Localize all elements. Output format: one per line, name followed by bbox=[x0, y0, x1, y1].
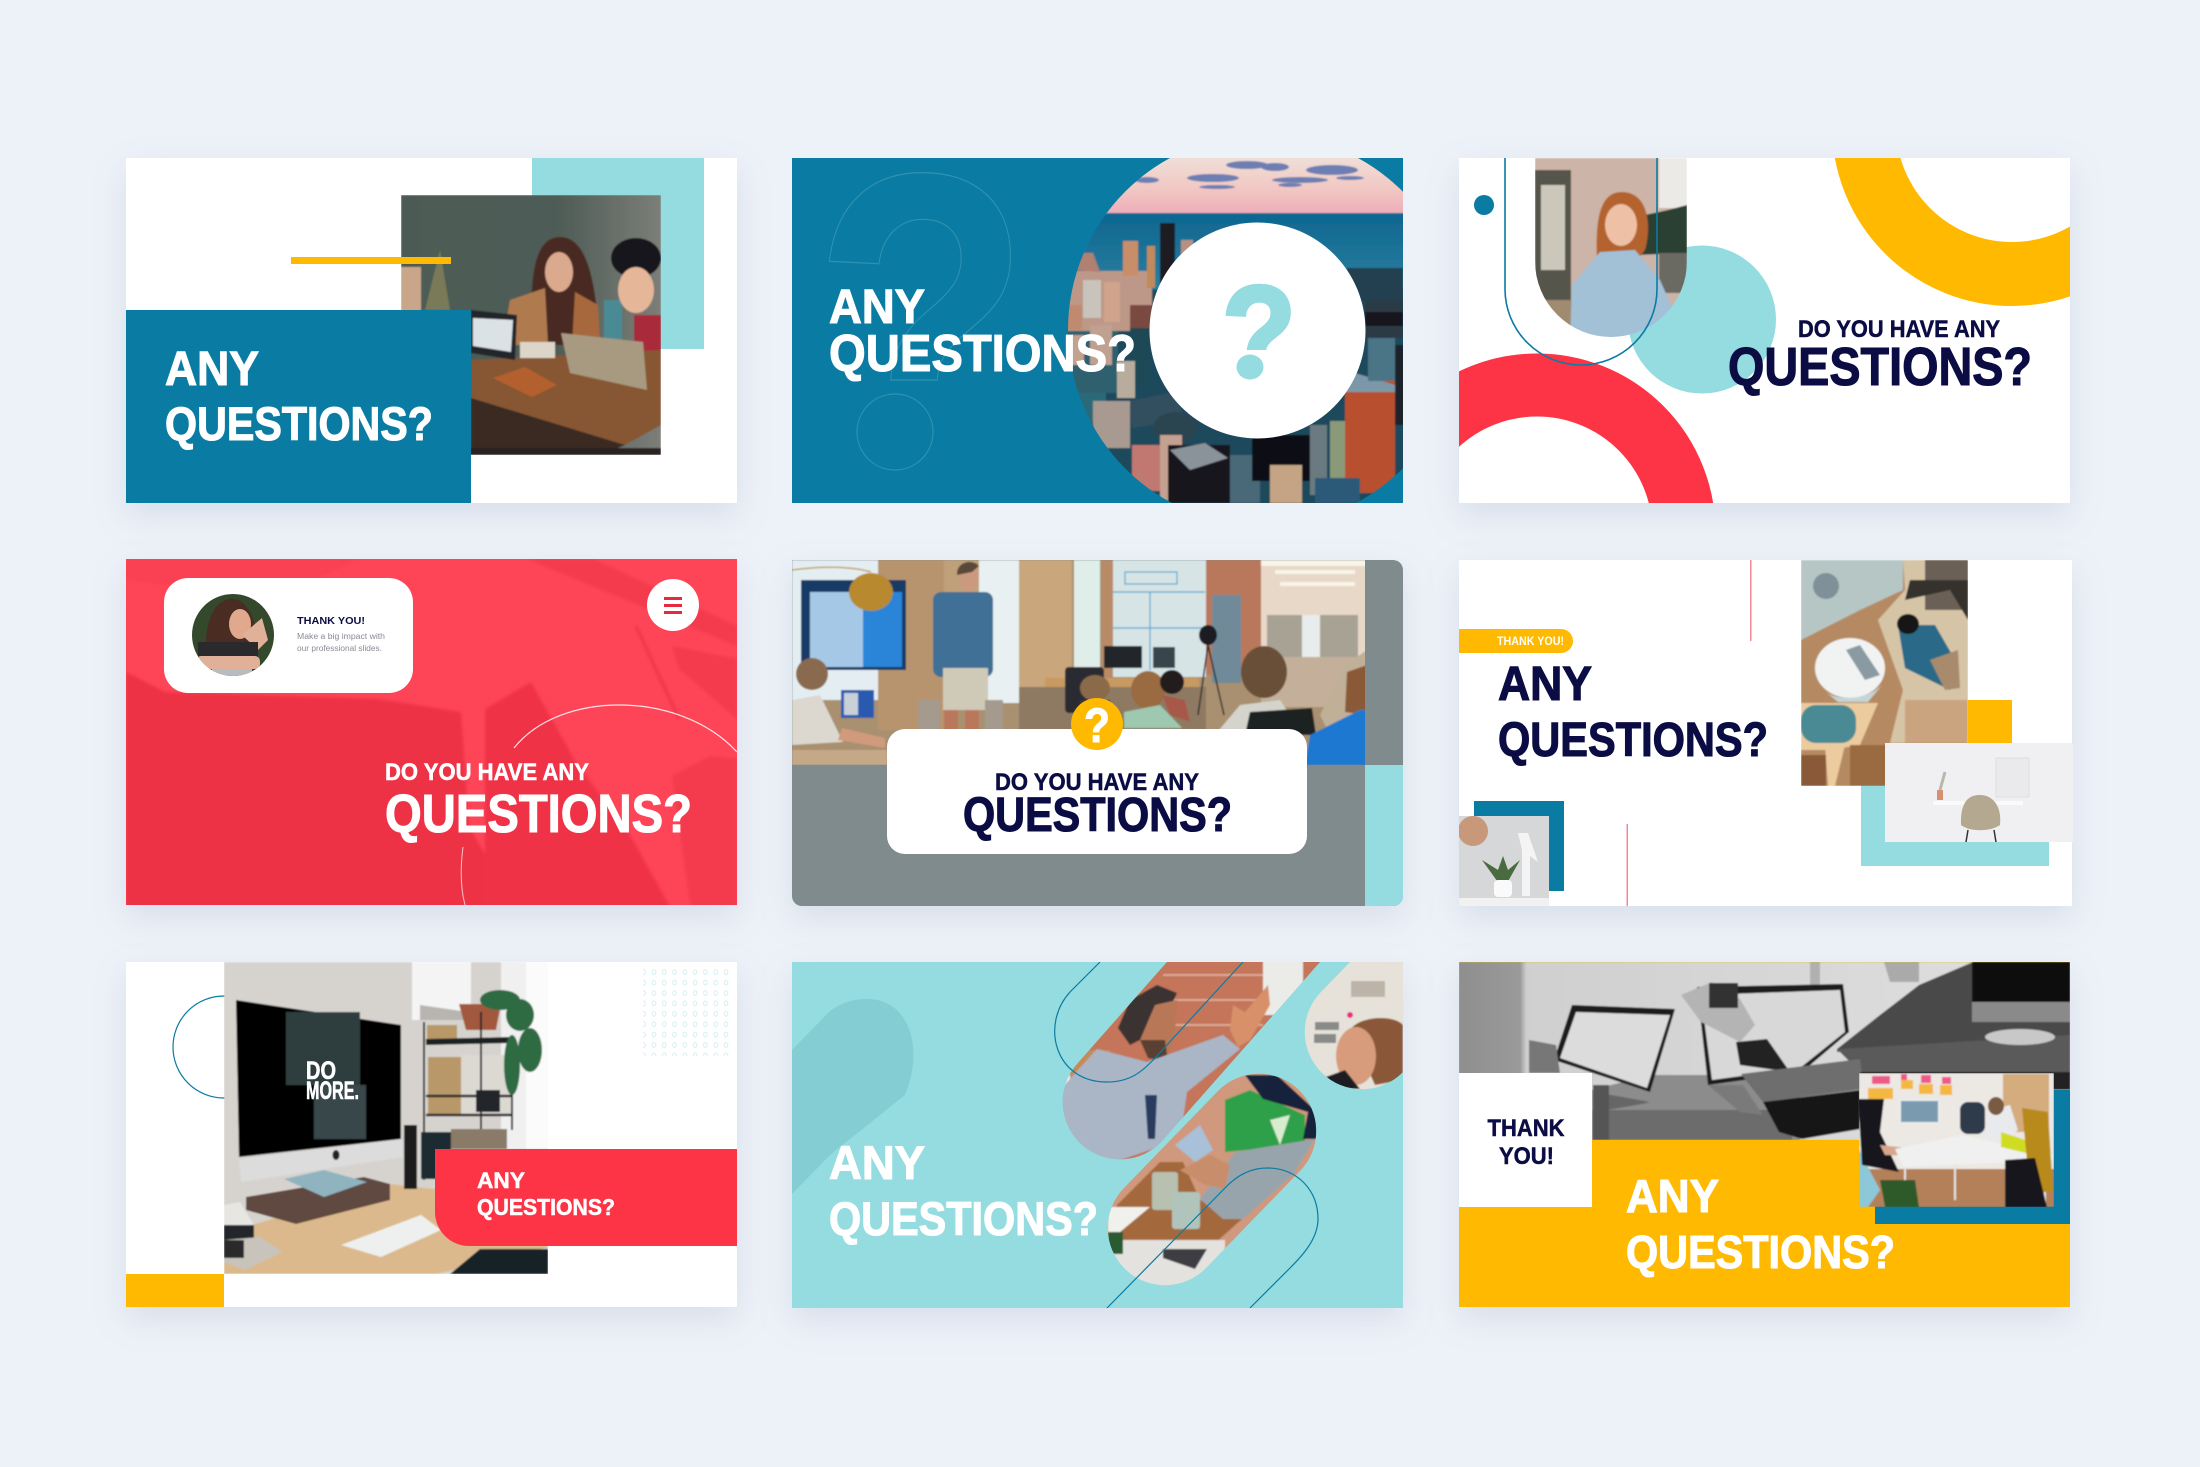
white thank you card: YOU! bbox=[1499, 1143, 1554, 1170]
heading: any questions: QUESTIONS? bbox=[1498, 714, 1768, 767]
thank you badge: THANK YOU! bbox=[1497, 636, 1564, 648]
teal side strip bbox=[1365, 765, 1403, 906]
heading: any questions: ANY bbox=[1498, 658, 1592, 711]
heading: do you have any questions: QUESTIONS? bbox=[1728, 337, 2032, 397]
heading: any questions: ANY bbox=[829, 281, 925, 334]
darker teal pill shape bbox=[792, 999, 913, 1194]
heading: any questions: QUESTIONS? bbox=[829, 325, 1136, 383]
heading: do you have any questions bbox=[1728, 316, 2032, 397]
caption text: Make a big impact with bbox=[297, 632, 385, 641]
heading: any questions: QUESTIONS? bbox=[829, 1192, 1098, 1245]
panel: slide 8 teal pills bbox=[792, 950, 1410, 1308]
yellow question badge bbox=[1071, 698, 1123, 753]
panel: slide 6 interior photos bbox=[1458, 560, 2073, 906]
heading: any questions: ANY bbox=[165, 343, 259, 396]
teal circle bbox=[1628, 246, 1776, 394]
panel: slide 1 blue any questions bbox=[126, 158, 737, 503]
heading: do you have any questions: DO YOU HAVE ANY bbox=[385, 759, 589, 786]
dot pattern bbox=[643, 968, 733, 1056]
heading: any questions bbox=[829, 281, 1136, 383]
profile card bbox=[164, 578, 413, 693]
photo: overhead person on sofa bbox=[1801, 560, 1968, 786]
outline circle bbox=[173, 996, 275, 1098]
teal accent block bbox=[532, 158, 704, 349]
blue dot bbox=[1474, 195, 1494, 215]
heading: any questions bbox=[829, 1136, 1098, 1245]
outline question mark watermark: ? bbox=[813, 85, 1031, 558]
white title card bbox=[887, 729, 1307, 854]
photo: team meeting at laptop bbox=[401, 195, 661, 455]
heading: do you have any questions: DO YOU HAVE ANY bbox=[1798, 316, 2000, 343]
caption text: our professional slides. bbox=[297, 644, 382, 653]
heading: any questions: ANY bbox=[1626, 1170, 1719, 1222]
photo: presenter in brick office bbox=[792, 560, 1367, 765]
yellow square bbox=[1968, 700, 2012, 743]
heading: any questions: ANY bbox=[477, 1168, 525, 1193]
heading: any questions bbox=[165, 343, 433, 450]
heading: any questions: QUESTIONS? bbox=[477, 1194, 615, 1220]
heading: any questions bbox=[477, 1168, 615, 1220]
photo: team around table bbox=[1858, 1073, 2054, 1207]
photo: grayscale laptops bbox=[1459, 962, 2070, 1140]
heading: any questions bbox=[1626, 1170, 1895, 1278]
photo pill: man high five bbox=[1062, 962, 1320, 1160]
blue square bbox=[1474, 801, 1564, 891]
white arc line bbox=[514, 705, 737, 752]
teal l block bbox=[1861, 745, 2049, 866]
panel: slide 5 office presentation bbox=[792, 560, 1403, 906]
screen text do more bbox=[306, 1057, 359, 1105]
heading: do you have any questions: QUESTIONS? bbox=[963, 789, 1232, 842]
yellow accent bar bbox=[291, 257, 451, 264]
blue title panel bbox=[126, 310, 471, 503]
panel: slide 2 city circle bbox=[792, 158, 1403, 503]
panel: slide 9 yellow team bbox=[1459, 962, 2070, 1307]
photo: smiling woman bbox=[1535, 158, 1687, 340]
photo pill: laughing woman bbox=[1304, 962, 1403, 1090]
background building texture bbox=[126, 559, 737, 910]
screen text do more: MORE. bbox=[306, 1077, 359, 1105]
heading: any questions: QUESTIONS? bbox=[165, 397, 433, 450]
red title panel bbox=[435, 1149, 737, 1246]
outline question mark watermark bbox=[828, 172, 1011, 470]
avatar photo bbox=[192, 594, 274, 677]
heading: any questions: ANY bbox=[829, 1136, 925, 1189]
menu icon bbox=[647, 579, 699, 631]
caption text bbox=[297, 632, 385, 653]
pink divider line top bbox=[1750, 560, 1752, 641]
panel: slide 3 rings bbox=[1454, 158, 2075, 520]
photo: imac on desk bbox=[224, 962, 548, 1274]
thank you badge bbox=[1459, 629, 1573, 653]
thin outline pills bbox=[1055, 962, 1318, 1308]
white circle with question mark: ? bbox=[1222, 258, 1296, 409]
heading: do you have any questions bbox=[963, 769, 1232, 842]
pink divider line bottom bbox=[1626, 824, 1628, 906]
decorative rings bbox=[1459, 158, 2070, 503]
thank you label: THANK YOU! bbox=[297, 616, 365, 627]
white thank you card: THANK bbox=[1488, 1115, 1565, 1142]
heading: any questions bbox=[1498, 658, 1768, 767]
outline u shape bbox=[1505, 158, 1657, 365]
heading: do you have any questions: DO YOU HAVE ANY bbox=[995, 769, 1199, 796]
screen text do more: DO bbox=[306, 1057, 336, 1085]
yellow question badge: ? bbox=[1084, 700, 1110, 753]
blue accent block bbox=[1875, 1090, 2070, 1224]
heading: do you have any questions bbox=[385, 759, 692, 844]
white circle with question mark bbox=[1150, 222, 1366, 438]
yellow corner square bbox=[126, 1274, 224, 1307]
panel: slide 7 desktop bbox=[126, 962, 737, 1307]
white thank you card bbox=[1459, 1073, 1592, 1207]
photo pill: laptop and table bbox=[1100, 1070, 1320, 1290]
photo: plant and lamp bbox=[1458, 816, 1549, 906]
heading: any questions: QUESTIONS? bbox=[1626, 1226, 1895, 1278]
photo: white desk with chair bbox=[1885, 743, 2073, 842]
heading: do you have any questions: QUESTIONS? bbox=[385, 784, 692, 844]
photo: city skyline circle bbox=[1060, 150, 1410, 505]
panel: slide 4 red bbox=[126, 559, 737, 910]
